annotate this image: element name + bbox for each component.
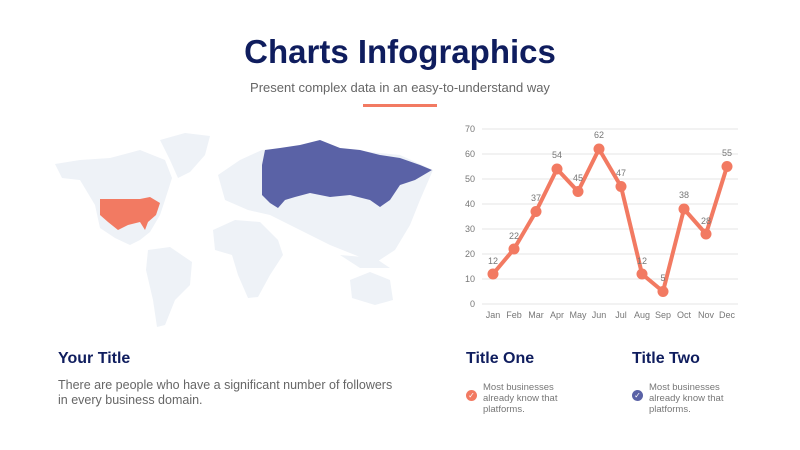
line chart: Oct [677,310,691,320]
text block: your title: There are people who have a significant number of followers [58,378,392,392]
australia [350,272,393,305]
icon: blue check [632,390,643,401]
line chart: Jul [615,310,627,320]
line chart: 50 [465,174,475,184]
text: Most businesses [649,382,720,393]
usa [100,197,160,230]
text: Most businesses [483,382,554,393]
south america [146,247,192,327]
line chart: Jan [486,310,500,320]
line chart: Mar [528,310,544,320]
line chart: 70 [465,124,475,134]
line chart: 28 [701,216,711,226]
text: platforms. [483,404,525,415]
line chart: Nov [698,310,714,320]
world map [55,133,433,327]
line chart: 60 [465,149,475,159]
line chart: Feb [506,310,522,320]
russia [262,140,432,208]
line chart: 10 [465,274,475,284]
eurasia [218,148,433,263]
text block: your title: Your Title [58,350,130,367]
line chart: Aug [634,310,650,320]
line chart: 0 [470,299,475,309]
line chart: 45 [573,173,583,183]
panel: title two [632,350,724,415]
north america [55,150,172,245]
line chart: Jun [592,310,606,320]
panel: title two: Title Two [632,350,700,367]
text block: your title [58,350,392,407]
line chart: 12 [637,256,647,266]
africa [213,220,283,298]
icon: coral check [466,390,477,401]
text: already know that [483,393,557,404]
line chart: 54 [552,150,562,160]
line chart: 62 [594,130,604,140]
text block: your title: in every business domain. [58,393,203,407]
indonesia [340,255,390,268]
line chart: 12 [488,256,498,266]
line chart: 55 [722,148,732,158]
line chart: 22 [509,231,519,241]
title: Charts Infographics [244,33,556,70]
line chart: Sep [655,310,671,320]
panel: title one: Title One [466,350,534,367]
text: already know that [649,393,723,404]
line chart: 47 [616,168,626,178]
line chart: 38 [679,190,689,200]
icon: blue check: ✓ [634,391,641,400]
icon: coral check: ✓ [468,391,475,400]
line chart: 37 [531,193,541,203]
line chart: May [569,310,587,320]
line chart: Apr [550,310,564,320]
text: platforms. [649,404,691,415]
greenland [160,133,210,178]
line chart: 5 [660,273,666,283]
subtitle: Present complex data in an easy-to-understand way [250,80,550,95]
line chart: 30 [465,224,475,234]
line chart: Dec [719,310,735,320]
panel: title one [466,350,558,415]
accent underline [363,104,437,107]
line chart [465,124,738,320]
line chart: 20 [465,249,475,259]
line chart: 40 [465,199,475,209]
